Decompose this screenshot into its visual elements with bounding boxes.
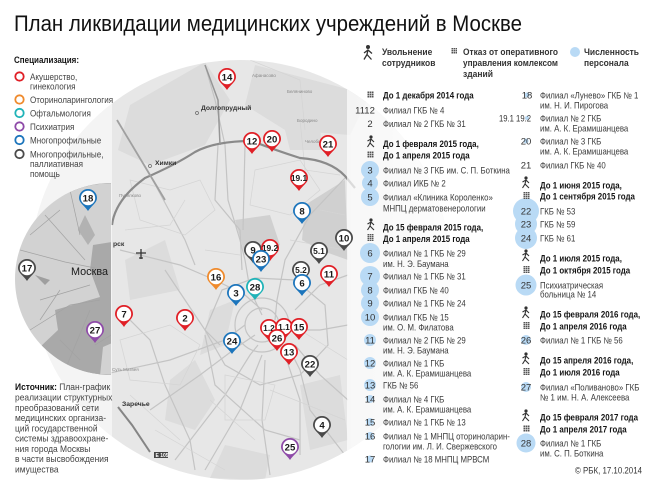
list column 1: 7 — [367, 272, 373, 282]
source note: в части высвобождения — [15, 454, 109, 464]
source note: системы здравоохране- — [15, 433, 108, 444]
list column 2: им. А. К. Ерамишанцева — [540, 123, 629, 134]
list column 1: До 1 апреля 2015 года — [383, 150, 470, 161]
legend: specialisation: Офтальмология — [30, 108, 91, 119]
legend: specialisation: Многопрофильные, — [30, 149, 103, 160]
list column 1: МНПЦ дерматовенерологии — [383, 203, 486, 214]
source note — [15, 382, 113, 475]
list column 1: 13 — [365, 380, 375, 392]
list column 1: До 1 декабря 2014 года — [383, 90, 474, 101]
list column 1: 15 — [365, 418, 375, 428]
map labels: Бородино — [297, 118, 318, 123]
list column 1: Филиал № 3 ГКБ им. С. П. Боткина — [383, 165, 510, 176]
source note: медицинских организа- — [15, 413, 106, 423]
map pins: 4 — [319, 420, 325, 432]
list column 2: 21 — [521, 160, 531, 172]
list column 2: 23 — [521, 220, 531, 230]
list column 2: больница № 14 — [540, 289, 597, 300]
map pins: 11 — [324, 270, 335, 280]
list column 1: Филиал № 1 ГКБ № 31 — [383, 271, 466, 282]
map pins: 19.1 — [291, 173, 307, 183]
key: icons meaning — [364, 45, 639, 80]
source note: имущества — [15, 464, 59, 475]
map labels: рск — [113, 241, 125, 248]
list column 1: Филиал «Клиника Короленко» — [383, 192, 493, 203]
list column 1: Филиал № 1 ГКБ — [383, 358, 445, 369]
key: icons meaning: управления комлексом — [463, 58, 558, 69]
legend: specialisation: помощь — [30, 169, 60, 179]
list column 2: staff circles — [513, 92, 539, 452]
list column 1: 6 — [367, 248, 373, 260]
list column 1: 17 — [365, 454, 375, 466]
list column 1: гологии им. Л. И. Свержевского — [383, 441, 497, 452]
map pins: 10 — [339, 234, 349, 244]
map pins: 22 — [305, 360, 315, 370]
map pins: 5.2 — [295, 265, 307, 275]
key: icons meaning: сотрудников — [382, 58, 436, 68]
list column 2: ГКБ № 61 — [540, 233, 576, 244]
list column 1: Филиал ГКБ № 40 — [383, 285, 449, 296]
main map of Moscow — [36, 60, 374, 480]
list column 2: 19.1 19.2 — [499, 114, 531, 124]
list column 2: 24 — [521, 234, 531, 244]
list column 2: 18 — [522, 90, 532, 102]
list column 1: staff circles — [360, 161, 380, 462]
map pins: 27 — [90, 326, 100, 336]
list column 1: им. Н. Э. Баумана — [383, 345, 449, 356]
list column 2: № 1 им. Н. А. Алексеева — [540, 392, 630, 403]
list column 2: До 1 сентября 2015 года — [540, 191, 635, 202]
list column 2: До 1 июля 2016 года — [540, 367, 620, 378]
list column 1: 11 — [365, 336, 375, 346]
map labels: Долгопрудный — [201, 104, 251, 112]
list column 2: 25 — [521, 280, 531, 292]
list column 1: Филиал № 2 ГКБ № 29 — [383, 335, 466, 346]
key: icons meaning: зданий — [463, 69, 493, 80]
list column 2: им. С. П. Боткина — [540, 448, 604, 459]
list column 1: им. О. М. Филатова — [383, 322, 454, 333]
map pins: 18 — [83, 194, 94, 204]
inset map: Moscow region — [15, 183, 111, 375]
list column 2: 28 — [521, 438, 531, 450]
map labels: Путилково — [119, 193, 142, 198]
list column 1: Филиал № 18 МНПЦ МРВСМ — [383, 454, 489, 465]
map pins: 23 — [256, 254, 266, 266]
list column 1: До 15 февраля 2015 года, — [383, 222, 483, 233]
source note: Источник: План-график — [15, 382, 110, 392]
map pins: 25 — [285, 442, 296, 454]
list column 1: Филиал № 1 ГКБ № 13 — [383, 417, 466, 428]
map pins: 2 — [182, 314, 188, 324]
map pins: 1.1 — [278, 322, 290, 332]
list column 2: До 1 апреля 2016 года — [540, 321, 627, 332]
map labels: Афанасово — [252, 73, 276, 78]
list column 1: им. Н. Э. Баумана — [383, 258, 449, 269]
list column 2: 20 — [521, 136, 531, 148]
list column 2 — [499, 90, 640, 459]
list column 1: Филиал ГКБ № 15 — [383, 312, 449, 323]
map pins: 6 — [299, 278, 305, 290]
list column 2: До 1 октября 2015 года — [540, 265, 630, 276]
legend: specialisation — [14, 55, 113, 179]
list column 1: 12 — [365, 358, 375, 370]
map pins: 9 — [250, 246, 256, 256]
source note: ций государственной — [15, 423, 98, 434]
list column 2: 26 — [521, 336, 531, 346]
white fade right of the map — [347, 90, 450, 450]
list column 2: ГКБ № 53 — [540, 206, 576, 217]
list column 1: 5 — [367, 192, 373, 204]
list column 1: 9 — [367, 298, 373, 310]
white fade left of the map — [37, 104, 112, 436]
list column 2: Филиал № 1 ГКБ № 56 — [540, 335, 623, 346]
map pins: 5.1 — [313, 246, 325, 256]
map labels: E 105 — [156, 453, 169, 459]
map pins: 1.2 — [263, 323, 275, 333]
map pins: 16 — [211, 272, 221, 284]
legend: specialisation: Специализация: — [14, 55, 79, 65]
source note: ния города Москвы — [15, 444, 90, 454]
key: icons meaning: Увольнение — [382, 47, 432, 57]
map labels: Беляниново — [287, 89, 313, 94]
list column 2: Филиал № 3 ГКБ — [540, 136, 602, 147]
map pins: 3 — [233, 288, 239, 300]
list column 2: Филиал «Лунево» ГКБ № 1 — [540, 90, 639, 101]
source note: реализации структурных — [15, 392, 113, 403]
title: План ликвидации медицинских учреждений в Москве — [14, 11, 522, 36]
list column 1 — [355, 90, 510, 466]
list column 2: ГКБ № 59 — [540, 219, 576, 230]
map pins: 20 — [267, 134, 277, 146]
list column 1: Филиал ИКБ № 2 — [383, 178, 446, 189]
list column 2: 27 — [521, 382, 531, 394]
list column 1: 2 — [367, 119, 373, 130]
list column 1: 1112 — [355, 106, 375, 116]
list column 1: им. А. К. Ерамишанцева — [383, 368, 472, 379]
map pins: 12 — [247, 136, 257, 148]
map pins: 24 — [227, 336, 238, 348]
map pins: 14 — [222, 72, 233, 84]
map pins: 15 — [294, 322, 305, 334]
list column 1: Филиал № 1 ГКБ № 24 — [383, 298, 466, 309]
map pins: 26 — [272, 334, 282, 344]
list column 1: 8 — [367, 286, 373, 296]
list column 1: 3 — [367, 166, 373, 176]
map pins — [18, 68, 353, 460]
list column 2: 22 — [521, 206, 531, 218]
map labels: Суть Матвея — [112, 367, 139, 372]
key: icons meaning: Численность — [584, 47, 639, 57]
list column 1: 14 — [365, 394, 375, 406]
map pins: 21 — [323, 140, 334, 150]
list column 2: Филиал ГКБ № 40 — [540, 160, 606, 171]
list column 2: Филиал № 1 ГКБ — [540, 438, 602, 449]
list column 2: До 15 апреля 2016 года, — [540, 355, 633, 366]
key: icons meaning: Отказ от оперативного — [463, 47, 558, 58]
map pins: 7 — [121, 310, 127, 320]
list column 2: До 1 июня 2015 года, — [540, 180, 622, 191]
copyright: © РБК, 17.10.2014 — [575, 466, 642, 476]
list column 2: Психиатрическая — [540, 280, 603, 291]
list column 1: 4 — [367, 178, 373, 190]
map labels: Заречье — [122, 401, 150, 408]
legend: specialisation: Оториноларингология — [30, 95, 113, 105]
map labels: Химки — [155, 160, 176, 167]
list column 1: им. А. К. Ерамишанцева — [383, 404, 472, 415]
key: icons meaning: персонала — [584, 58, 630, 68]
map pins: 17 — [22, 264, 32, 274]
map pins: 13 — [284, 348, 294, 358]
list column 1: Филиал № 1 МНПЦ оториноларин- — [383, 431, 510, 442]
legend: specialisation: паллиативная — [30, 159, 83, 169]
map labels — [112, 73, 333, 459]
list column 2: До 15 февраля 2016 года, — [540, 309, 640, 320]
list column 2: До 15 февраля 2017 года — [540, 412, 638, 423]
list column 1: ГКБ № 56 — [383, 380, 419, 391]
list column 2: им. А. К. Ерамишанцева — [540, 146, 629, 157]
map pins: 28 — [250, 282, 261, 294]
list column 1: 10 — [365, 312, 375, 324]
map pins: 19.2 — [262, 243, 278, 253]
list column 1: До 1 февраля 2015 года, — [383, 138, 479, 149]
ring road — [112, 141, 355, 225]
list column 2: До 1 июля 2015 года, — [540, 253, 622, 264]
list column 2: Филиал № 2 ГКБ — [540, 113, 602, 124]
list column 2: Филиал «Поливаново» ГКБ — [540, 382, 640, 393]
list column 2: им. Н. И. Пирогова — [540, 100, 608, 111]
legend: specialisation: гинекология — [30, 81, 76, 92]
list column 1: Филиал № 4 ГКБ — [383, 394, 445, 405]
list column 1: До 1 апреля 2015 года — [383, 233, 470, 244]
list column 1: Филиал № 1 ГКБ № 29 — [383, 248, 466, 259]
legend: specialisation: Многопрофильные — [30, 135, 101, 146]
map pins: 8 — [299, 206, 305, 218]
list column 1: Филиал № 2 ГКБ № 31 — [383, 118, 466, 129]
list column 2: До 1 апреля 2017 года — [540, 424, 627, 435]
list column 1: 16 — [365, 432, 375, 442]
list column 1: Филиал ГКБ № 4 — [383, 105, 445, 116]
source note: преобразований сети — [15, 403, 99, 413]
inset map: Moscow region: Москва — [71, 266, 109, 278]
map labels: Челобитьево — [305, 139, 333, 144]
legend: specialisation: Акушерство, — [30, 72, 77, 82]
legend: specialisation: Психиатрия — [30, 122, 75, 132]
